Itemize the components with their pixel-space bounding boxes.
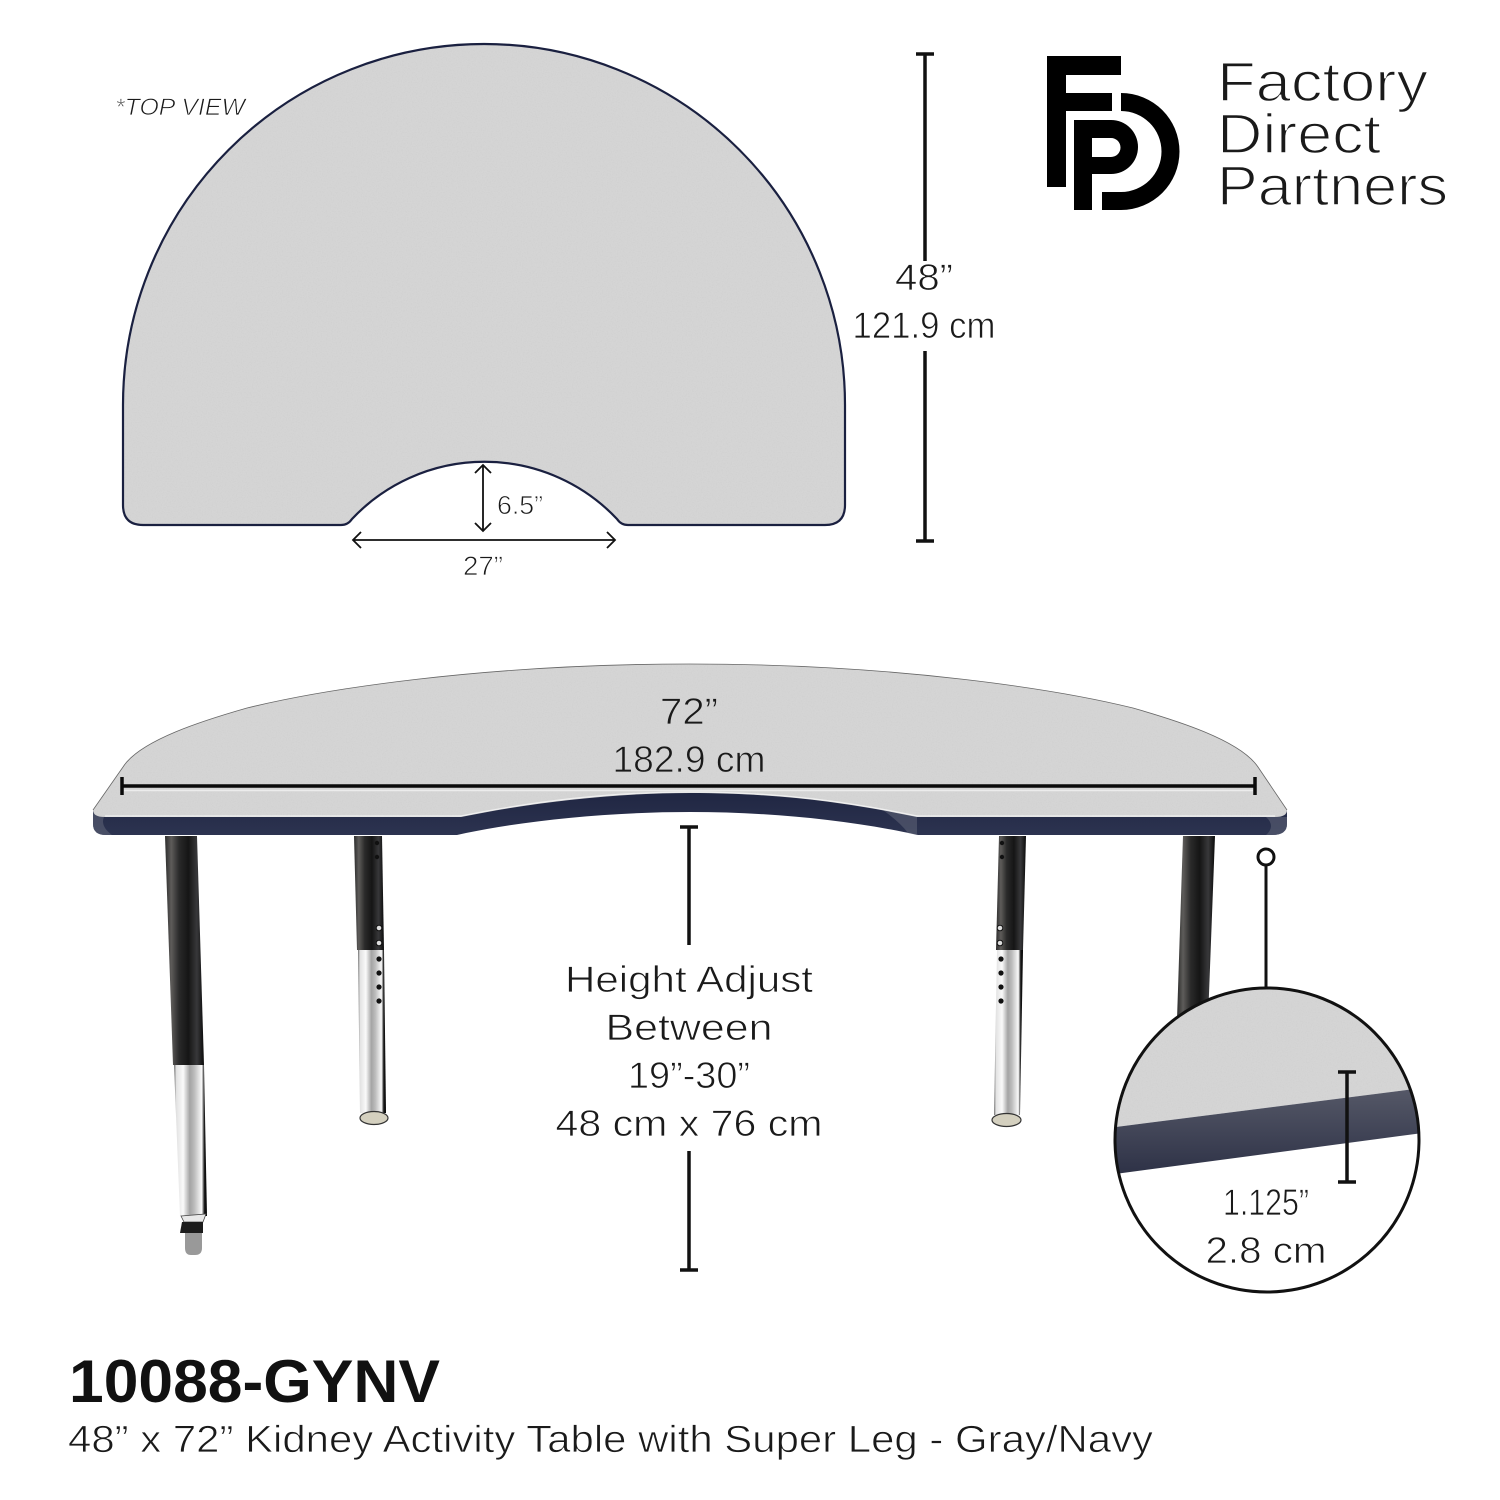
leg: front left with caster: [165, 836, 207, 1255]
table perspective illustration: [93, 664, 1287, 1255]
height adjust text: 19”-30”: [628, 1055, 750, 1096]
logo wordmark: Factory: [1217, 50, 1428, 113]
notch depth arrow: [475, 465, 491, 531]
top view table diagram: [115, 44, 845, 581]
depth centimeters: 121.9 cm: [852, 305, 996, 346]
product description: 48” x 72” Kidney Activity Table with Super Leg - Gray/Navy: [68, 1419, 1153, 1461]
notch depth label: 6.5”: [497, 490, 543, 520]
width dimension: [122, 691, 1255, 795]
top view note: *TOP VIEW: [115, 94, 247, 121]
notch width label: 27”: [463, 551, 503, 581]
height adjustment dimension: [556, 827, 822, 1270]
height adjust text: 48 cm x 76 cm: [556, 1103, 822, 1144]
depth inches: 48”: [895, 257, 953, 298]
height line lower: [680, 1151, 698, 1270]
table top fill: [123, 44, 845, 525]
table edge band navy: [93, 785, 1287, 835]
leg: front right: [1177, 836, 1215, 1020]
height line upper: [680, 827, 698, 945]
height adjust text: Height Adjust: [565, 959, 814, 1000]
width centimeters: 182.9 cm: [612, 739, 766, 780]
height adjust text: [556, 959, 822, 1144]
thickness marker: [1338, 1072, 1356, 1182]
width inches: 72”: [660, 691, 718, 732]
thickness centimeters: 2.8 cm: [1206, 1230, 1326, 1271]
width line: [122, 777, 1255, 795]
logo wordmark: Partners: [1217, 154, 1448, 217]
dimension line upper: [916, 54, 934, 261]
logo: Factory Direct Partners: [1047, 50, 1448, 217]
surface rear edge: [93, 664, 1287, 810]
height adjust text: Between: [606, 1007, 772, 1048]
leg: rear right: [992, 836, 1026, 1126]
thickness inches: 1.125”: [1223, 1182, 1309, 1223]
callout pin: [1264, 865, 1268, 988]
lens contents: [1116, 990, 1418, 1174]
width line highlight: [124, 790, 1253, 792]
surface front highlight: [105, 792, 1275, 816]
logo mark FPD: [1047, 56, 1180, 210]
table top surface: [93, 664, 1287, 817]
model number: 10088-GYNV: [69, 1348, 440, 1415]
logo wordmark: Direct: [1217, 102, 1381, 165]
notch width arrow: [353, 532, 615, 548]
table top outline: [123, 44, 845, 525]
leg: rear left: [354, 836, 388, 1124]
logo wordmark: [1217, 50, 1448, 217]
callout: edge thickness magnifier: [1114, 848, 1420, 1294]
table edge highlights: [93, 808, 1287, 835]
depth dimension: [852, 54, 996, 541]
dimension line lower: [916, 351, 934, 541]
lens ring: [1115, 988, 1419, 1292]
